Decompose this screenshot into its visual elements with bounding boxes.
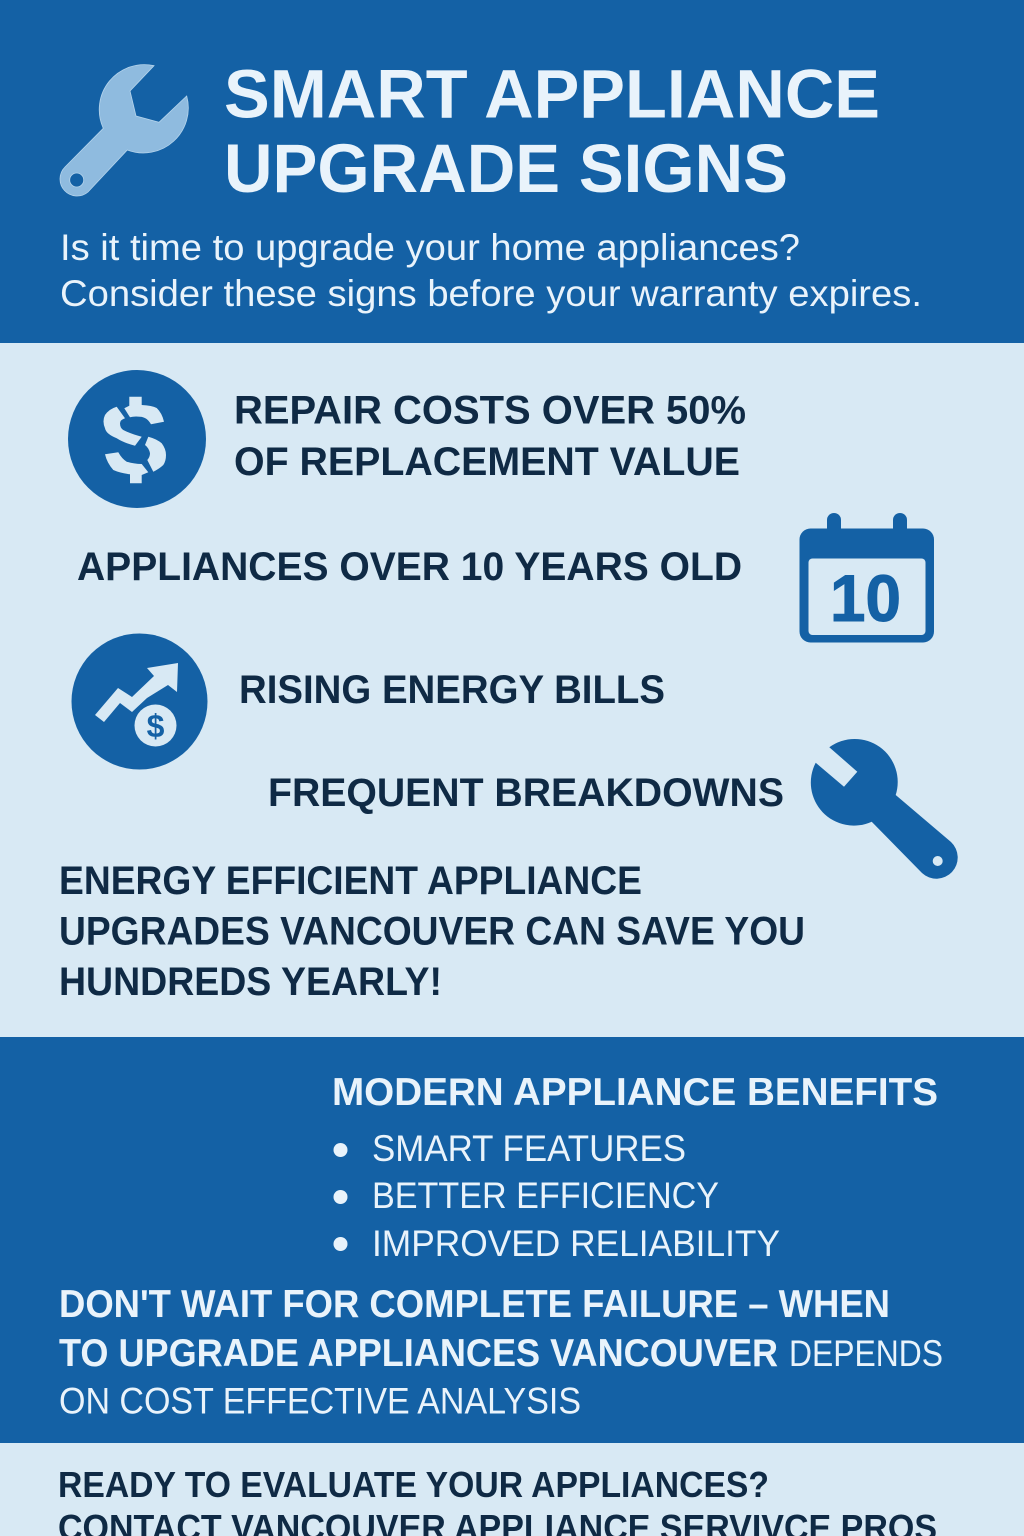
panel: header bbox=[0, 0, 1024, 343]
panel: benefits bbox=[0, 1037, 1024, 1443]
text: cost analysis message: TO UPGRADE APPLIANCES VANCOUVER bbox=[59, 1332, 778, 1375]
sign: energy bills: RISING ENERGY BILLS bbox=[239, 668, 665, 712]
icon: rising bills circle: $ bbox=[147, 708, 165, 744]
icon: dollar circle bbox=[68, 370, 206, 508]
text: cost analysis message bbox=[59, 1283, 943, 1422]
sign: breakdowns: FREQUENT BREAKDOWNS bbox=[268, 771, 784, 815]
panel: warning signs bbox=[0, 343, 1024, 1037]
icon: rising bills circle bbox=[72, 634, 208, 770]
panel: call to action bbox=[0, 1443, 1024, 1536]
callout: savings: UPGRADES VANCOUVER CAN SAVE YOU bbox=[59, 910, 805, 954]
title: UPGRADE SIGNS bbox=[224, 130, 788, 207]
title bbox=[224, 56, 880, 207]
icon: light wrench bbox=[60, 65, 188, 196]
callout: savings: ENERGY EFFICIENT APPLIANCE bbox=[59, 859, 642, 903]
icon: dark wrench bbox=[811, 739, 958, 879]
sign: appliance age: APPLIANCES OVER 10 YEARS OLD bbox=[77, 545, 742, 589]
text: cost analysis message: DEPENDS bbox=[789, 1333, 943, 1374]
title: SMART APPLIANCE bbox=[224, 56, 880, 132]
sign: repair costs: REPAIR COSTS OVER 50% bbox=[234, 388, 746, 432]
subtitle: Is it time to upgrade your home appliances? bbox=[60, 227, 800, 268]
text: cost analysis message: DON'T WAIT FOR COMPLETE FAILURE – WHEN bbox=[59, 1283, 890, 1326]
benefits list: BETTER EFFICIENCY bbox=[372, 1175, 719, 1216]
benefits list: IMPROVED RELIABILITY bbox=[372, 1223, 780, 1264]
benefits list: SMART FEATURES bbox=[372, 1128, 686, 1169]
callout: savings: HUNDREDS YEARLY! bbox=[59, 960, 442, 1004]
heading: benefits: MODERN APPLIANCE BENEFITS bbox=[332, 1071, 938, 1114]
text: call to action bbox=[58, 1464, 937, 1536]
icon: calendar 10 bbox=[800, 513, 934, 642]
subtitle bbox=[60, 227, 922, 314]
sign: repair costs: OF REPLACEMENT VALUE bbox=[234, 440, 740, 484]
benefits list bbox=[334, 1128, 780, 1264]
callout: savings bbox=[59, 859, 805, 1004]
icon: calendar 10: 10 bbox=[830, 561, 901, 635]
sign: repair costs bbox=[234, 388, 746, 484]
text: cost analysis message: ON COST EFFECTIVE ANALYSIS bbox=[59, 1380, 581, 1422]
text: call to action: READY TO EVALUATE YOUR APPLIANCES? bbox=[58, 1464, 769, 1505]
subtitle: Consider these signs before your warranty expires. bbox=[60, 273, 922, 314]
